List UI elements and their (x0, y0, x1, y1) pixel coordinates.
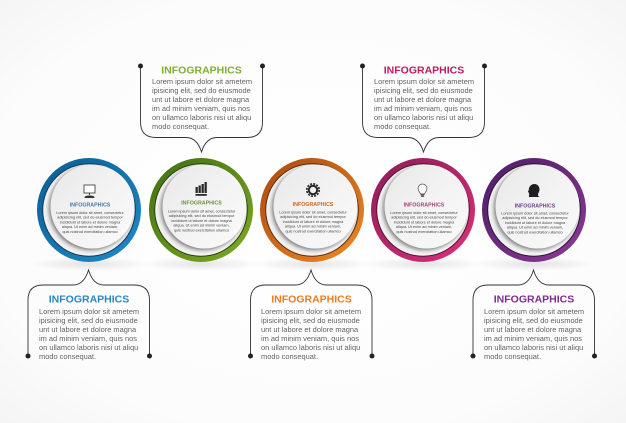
circle 2 text: quis nostrud exercitation ullamco (174, 228, 229, 232)
callout: bottom orange: im ad minim veniam, quis nos (261, 334, 359, 343)
circle 1 text: incididunt ut labore et dolore magna (60, 220, 121, 224)
callout: bottom purple: modo consequat. (484, 352, 541, 361)
callout: bottom orange: on ullamco laboris nisi ut aliqu (261, 343, 360, 352)
callout: bottom blue (26, 270, 152, 361)
circle 4 text: INFOGRAPHICS (404, 202, 445, 208)
circle 1 text (56, 202, 124, 234)
icon: head silhouette (528, 184, 540, 197)
circle 5 text: Lorem ipsum dolor sit amet, consectetur (501, 212, 569, 216)
icon: light bulb (418, 184, 427, 196)
callout: top green: modo consequat. (152, 122, 209, 131)
circle 4 text: aliqua. Ut enim ad minim veniam, (396, 225, 452, 229)
callout: top pink: unt ut labore et dolore magna (374, 95, 472, 104)
circle 2 text: adipisicing elit, sed do eiusmod tempor (169, 214, 235, 218)
callout: top green: ipisicing elit, sed do eiusmode (152, 86, 251, 95)
callout: top pink: on ullamco laboris nisi ut aliqu (374, 113, 473, 122)
callout: bottom orange (248, 270, 374, 361)
callout: top green: INFOGRAPHICS (161, 64, 242, 76)
callout: top green: Lorem ipsum dolor sit ametem (152, 77, 252, 86)
callout: top green (138, 64, 265, 152)
callout: bottom purple: unt ut labore et dolore magna (484, 325, 582, 334)
panel: circle 1 blue (27, 158, 151, 271)
callout: bottom blue: Lorem ipsum dolor sit ametem (39, 307, 139, 316)
callout: bottom purple: on ullamco laboris nisi ut aliqu (484, 343, 583, 352)
panel: circle 3 orange (250, 158, 374, 271)
circle 5 text: adipisicing elit, sed do eiusmod tempor (502, 216, 568, 220)
callout: bottom orange: INFOGRAPHICS (271, 294, 352, 306)
circle 5 text: quis nostrud exercitation ullamco (507, 230, 563, 234)
callout: top pink: INFOGRAPHICS (384, 64, 464, 76)
circle 3 text (279, 202, 347, 233)
circle 1 text: INFOGRAPHICS (70, 202, 111, 208)
icon: monitor (84, 185, 95, 198)
circle 3 text: Lorem ipsum dolor sit amet, consectetur (279, 210, 347, 214)
circle 2 text: Lorem ipsum dolor sit amet, consectetur (168, 210, 236, 214)
circle 3 text: quis nostrud exercitation ullamco (285, 229, 341, 233)
callout: bottom purple: ipisicing elit, sed do eiusmode (484, 316, 583, 325)
circle 1 text: Lorem ipsum dolor sit amet, consectetur (56, 211, 124, 215)
callout: bottom purple (470, 270, 597, 361)
circle 4 text: quis nostrud exercitation ullamco (396, 230, 452, 234)
circle 3 text: adipisicing elit, sed do eiusmod tempor (280, 215, 346, 219)
callout: bottom blue: im ad minim veniam, quis nos (39, 334, 137, 343)
circle 4 text: Lorem ipsum dolor sit amet, consectetur (390, 211, 458, 215)
callout: top pink: Lorem ipsum dolor sit ametem (374, 77, 474, 86)
callout: bottom purple: INFOGRAPHICS (494, 294, 574, 306)
icon: gear (307, 184, 319, 196)
circle 1 text: adipisicing elit, sed do eiusmod tempor (57, 216, 123, 220)
callout: top pink: modo consequat. (374, 122, 431, 131)
callout: bottom orange: ipisicing elit, sed do eiusmode (261, 316, 360, 325)
circle 4 text (390, 202, 458, 234)
circle 3 text: INFOGRAPHICS (293, 202, 334, 208)
callout: bottom blue: ipisicing elit, sed do eiusmode (39, 316, 138, 325)
panel: circle 2 green (139, 158, 263, 271)
circle 2 text: INFOGRAPHICS (181, 200, 222, 206)
callout: bottom purple: im ad minim veniam, quis nos (484, 334, 582, 343)
circle 4 text: adipisicing elit, sed do eiusmod tempor (391, 216, 457, 220)
circle 1 text: quis nostrud exercitation ullamco (62, 230, 118, 234)
callout: top green: unt ut labore et dolore magna (152, 95, 250, 104)
callout: bottom blue: modo consequat. (39, 352, 96, 361)
panel: circle 5 purple (472, 158, 596, 271)
circle 2 text (168, 200, 236, 232)
icon: bar chart (196, 182, 207, 196)
callout: top green: on ullamco laboris nisi ut aliqu (152, 113, 251, 122)
callout: bottom blue: INFOGRAPHICS (49, 294, 129, 306)
callout: top pink (360, 64, 487, 152)
circle 3 text: aliqua. Ut enim ad minim veniam, (285, 225, 341, 229)
circle 5 text: aliqua. Ut enim ad minim veniam, (507, 226, 563, 230)
circle 3 text: incididunt ut labore et dolore magna (283, 220, 344, 224)
panel: circle 4 pink (361, 158, 485, 271)
circle 4 text: incididunt ut labore et dolore magna (394, 220, 455, 224)
circle 5 text: incididunt ut labore et dolore magna (505, 221, 566, 225)
callout: bottom blue: unt ut labore et dolore magna (39, 325, 137, 334)
callout: bottom blue: on ullamco laboris nisi ut aliqu (39, 343, 138, 352)
callout: top pink: ipisicing elit, sed do eiusmode (374, 86, 473, 95)
callout: top pink: im ad minim veniam, quis nos (374, 104, 472, 113)
callout: bottom orange: Lorem ipsum dolor sit ametem (261, 307, 361, 316)
callout: bottom orange: modo consequat. (261, 352, 318, 361)
circle 2 text: incididunt ut labore et dolore magna (171, 219, 233, 223)
circle 2 text: aliqua. Ut enim ad minim veniam, (173, 224, 230, 228)
callout: top green: im ad minim veniam, quis nos (152, 104, 250, 113)
circle 1 text: aliqua. Ut enim ad minim veniam, (62, 225, 118, 229)
circle 5 text (501, 204, 569, 234)
circle 5 text: INFOGRAPHICS (515, 204, 556, 210)
callout: bottom purple: Lorem ipsum dolor sit ametem (484, 307, 584, 316)
callout: bottom orange: unt ut labore et dolore magna (261, 325, 359, 334)
